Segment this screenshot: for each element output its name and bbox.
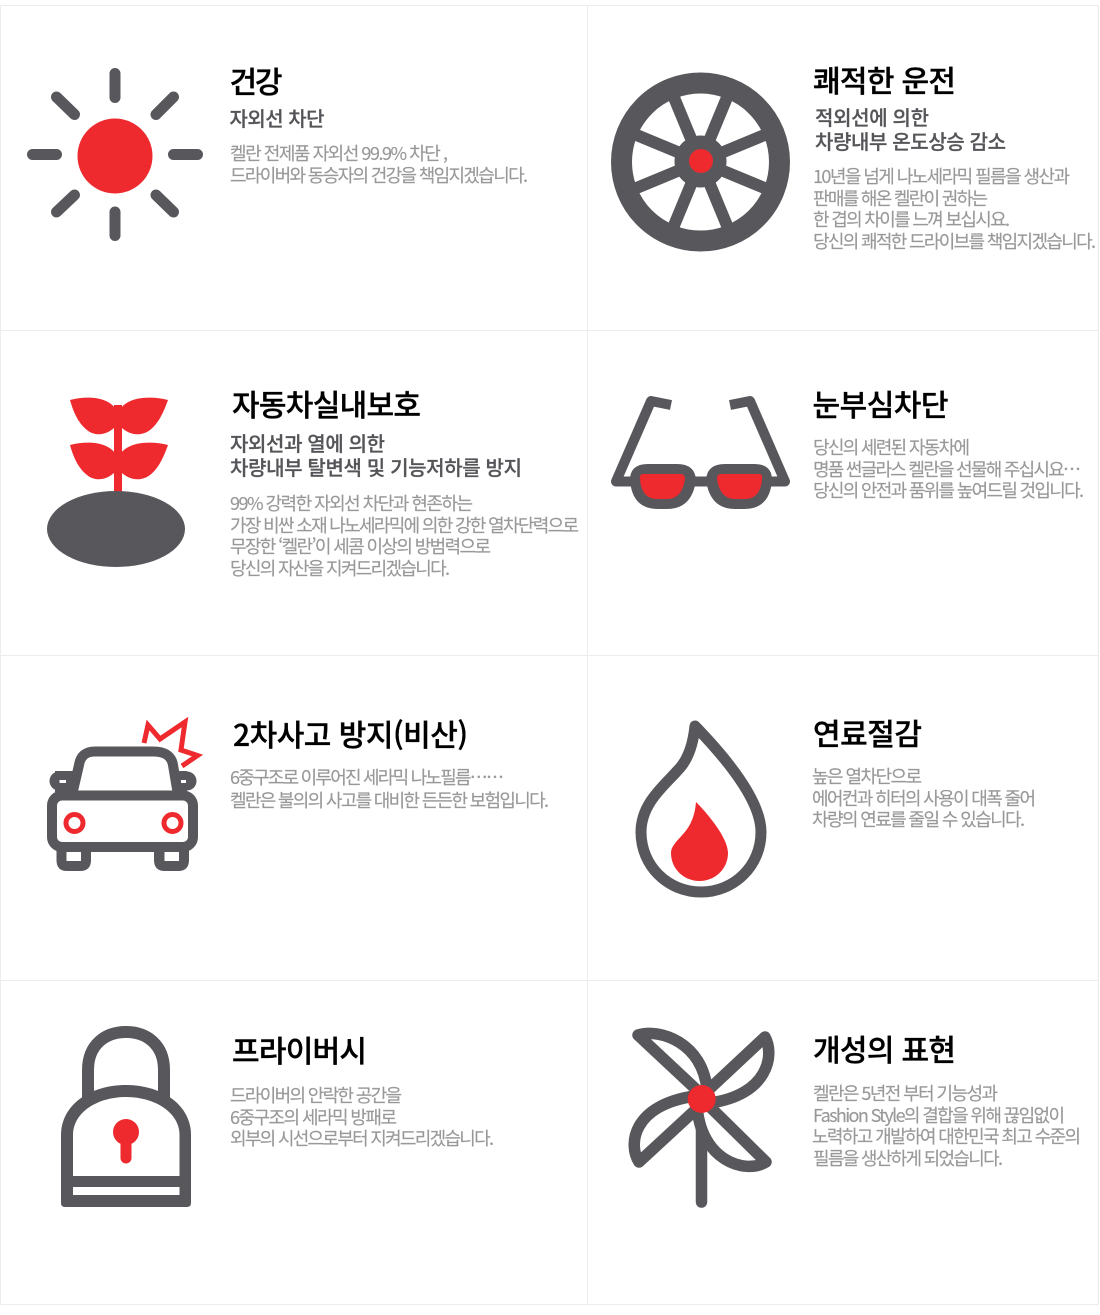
- panel: 눈부심차단: [616, 381, 1084, 509]
- text block: 개성의 표현 description: Fashion Style의 결합을 위해 끊임없이: [813, 1102, 1065, 1128]
- heading: 2차사고 방지(비산): 2차사고 방지(비산): [233, 711, 468, 755]
- icon: plant: [47, 398, 185, 567]
- panel: 쾌적한 운전: [622, 57, 1096, 254]
- icon: fuel drop: [641, 726, 761, 892]
- text block: 눈부심차단 description: [813, 434, 1084, 503]
- text block: 2차사고 방지 description: 켈란은 불의의 사고를 대비한 든든한 보험입니다.: [230, 787, 549, 813]
- text block: 쾌적한 운전 description: 당신의 쾌적한 드라이브를 책임지겠습니다.: [813, 228, 1096, 254]
- subheading: 적외선에 의한 차량내부 온도상승 감소: [815, 102, 1006, 155]
- subheading: 자외선 차단: 자외선 차단: [230, 103, 324, 132]
- panel: 연료절감: [641, 710, 1036, 892]
- text block: 쾌적한 운전 description: 10년을 넘게 나노세라믹 필름을 생산과: [813, 163, 1070, 189]
- panel: 건강: [32, 58, 528, 236]
- panel: 2차사고 방지: [50, 711, 549, 871]
- subheading: 적외선에 의한 차량내부 온도상승 감소: 적외선에 의한: [815, 102, 929, 131]
- heading: 건강: 건강: [230, 58, 282, 102]
- subheading: 자외선과 열에 의한 차량내부 탈변색 및 기능저하를 방지: 차량내부 탈변색 및 기능저하를 방지: [230, 452, 522, 481]
- text block: 자동차실내보호 description: 무장한 ‘켈란’이 세콤 이상의 방범력으로: [230, 533, 491, 559]
- text block: 2차사고 방지 description: [230, 764, 549, 813]
- subheading: 자외선과 열에 의한 차량내부 탈변색 및 기능저하를 방지: 자외선과 열에 의한: [230, 428, 385, 457]
- text block: 건강 description: 드라이버와 동승자의 건강을 책임지겠습니다.: [230, 162, 528, 188]
- text block: 자동차실내보호 description: [230, 490, 579, 581]
- text block: 2차사고 방지 description: 6중구조로 이루어진 세라믹 나노필름……: [230, 764, 504, 790]
- text block: 자동차실내보호 description: 99% 강력한 자외선 차단과 현존하는: [230, 490, 473, 516]
- heading: 연료절감: 연료절감: [813, 710, 922, 754]
- text block: 연료절감 description: 높은 열차단으로: [812, 763, 922, 789]
- subheading: 자외선과 열에 의한 차량내부 탈변색 및 기능저하를 방지: [230, 428, 522, 481]
- heading: 프라이버시: 프라이버시: [232, 1027, 367, 1071]
- icon: padlock: [61, 1032, 191, 1207]
- subheading: 적외선에 의한 차량내부 온도상승 감소: 차량내부 온도상승 감소: [815, 126, 1006, 155]
- heading: 자동차실내보호: 자동차실내보호: [232, 381, 421, 425]
- icon: pinwheel: [634, 1033, 769, 1202]
- icon: damaged car: [50, 722, 198, 871]
- text block: 개성의 표현 description: 노력하고 개발하여 대한민국 최고 수준의: [812, 1123, 1081, 1149]
- heading: 개성의 표현: 개성의 표현: [813, 1026, 956, 1070]
- text block: 건강 description: [230, 140, 528, 188]
- text block: 개성의 표현 description: [812, 1080, 1081, 1171]
- text block: 쾌적한 운전 description: 판매를 해온 켈란이 권하는: [813, 185, 988, 211]
- icon: sun: [32, 74, 198, 236]
- icon: sunglasses: [616, 401, 785, 509]
- text block: 건강 description: 켈란 전제품 자외선 99.9% 차단 ,: [230, 140, 448, 166]
- text block: 눈부심차단 description: 당신의 안전과 품위를 높여드릴 것입니다.: [813, 477, 1084, 503]
- text block: 눈부심차단 description: 당신의 세련된 자동차에: [813, 434, 970, 460]
- panel: 프라이버시: [61, 1027, 494, 1207]
- text block: 자동차실내보호 description: 당신의 자산을 지켜드리겠습니다.: [230, 555, 450, 581]
- text block: 프라이버시 description: 드라이버의 안락한 공간을: [230, 1082, 402, 1108]
- text block: 프라이버시 description: [230, 1082, 494, 1151]
- text block: 프라이버시 description: 6중구조의 세라믹 방패로: [230, 1104, 397, 1130]
- text block: 자동차실내보호 description: 가장 비싼 소재 나노세라믹에 의한 강한 열차단력으로: [230, 512, 579, 538]
- text block: 쾌적한 운전 description: 한 겹의 차이를 느껴 보십시요.: [813, 206, 1010, 232]
- panel: 자동차실내보호: [47, 381, 579, 581]
- text block: 프라이버시 description: 외부의 시선으로부터 지켜드리겠습니다.: [230, 1125, 494, 1151]
- panel: 개성의 표현: [634, 1026, 1081, 1202]
- text block: 연료절감 description: 차량의 연료를 줄일 수 있습니다.: [812, 806, 1025, 832]
- text block: 연료절감 description: 에어컨과 히터의 사용이 대폭 줄어: [812, 785, 1036, 811]
- text block: 눈부심차단 description: 명품 썬글라스 켈란을 선물해 주십시요…: [813, 456, 1081, 482]
- text block: 개성의 표현 description: 켈란은 5년전 부터 기능성과: [813, 1080, 998, 1106]
- heading: 눈부심차단: 눈부심차단: [812, 381, 948, 425]
- icon: wheel: [622, 83, 780, 241]
- text block: 연료절감 description: [812, 763, 1036, 832]
- text block: 개성의 표현 description: 필름을 생산하게 되었습니다.: [813, 1145, 1003, 1171]
- heading: 쾌적한 운전: 쾌적한 운전: [813, 57, 956, 101]
- text block: 쾌적한 운전 description: [813, 163, 1096, 254]
